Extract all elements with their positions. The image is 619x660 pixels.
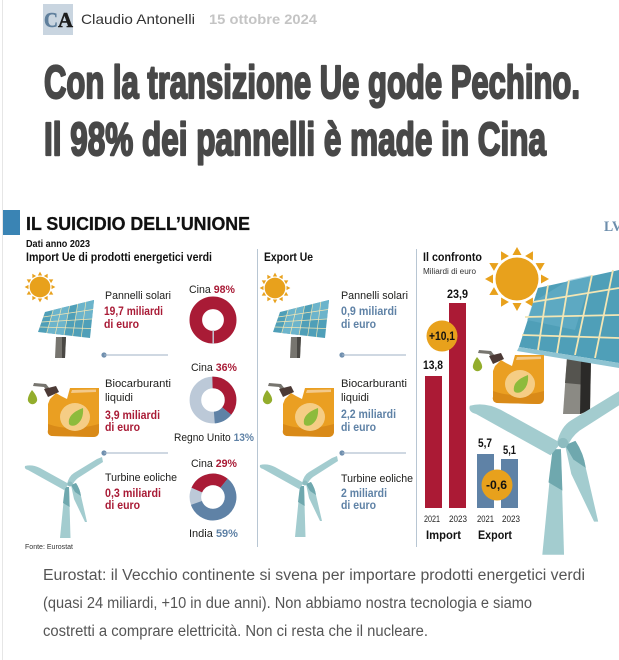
donut label India: India 59% [189, 528, 238, 540]
import solar label: di euro [104, 319, 139, 331]
connector [101, 352, 168, 358]
page edge line [2, 0, 3, 660]
import biofuel label: 3,9 miliardi [105, 410, 160, 422]
donut label Cina 29: Cina 29% [191, 458, 237, 470]
bar chart: 2023 [502, 514, 520, 524]
comparison unit: Miliardi di euro [423, 267, 477, 276]
icon: sun [260, 273, 290, 303]
import wind label: Turbine eoliche [105, 472, 177, 484]
author avatar [43, 4, 74, 35]
import heading: Import Ue di prodotti energetici verdi [26, 252, 212, 264]
bar chart: 2021 [477, 514, 494, 524]
callout +10,1: +10,1 [429, 329, 455, 343]
donut label Regno Unito: Regno Unito 13% [174, 432, 254, 444]
donut: biofuel [195, 382, 231, 418]
comparison heading: Il confronto [423, 252, 482, 264]
import wind label [105, 472, 177, 512]
icon: wind turbine [260, 456, 338, 537]
connector [339, 450, 406, 456]
import solar label [104, 290, 171, 331]
caption: Eurostat: il Vecchio continente si svena per importare prodotti energetici verdi [43, 567, 585, 584]
panel: import [25, 252, 254, 551]
bar chart: Export [478, 530, 512, 542]
panel: export [260, 252, 413, 537]
infographic heading: IL SUICIDIO DELL’UNIONE [26, 214, 250, 234]
export wind label: di euro [341, 500, 376, 512]
connector [339, 352, 406, 358]
icon: fuel can [263, 383, 334, 437]
export heading: Export Ue [264, 252, 313, 264]
export solar label: di euro [341, 319, 376, 331]
bar chart: 5,7 [478, 436, 492, 450]
icon: big wind turbine [469, 387, 619, 555]
author avatar: C [44, 8, 58, 32]
bar chart: 13,8 [423, 358, 443, 372]
callout +10,1 [426, 320, 458, 352]
icon: fuel can [28, 383, 99, 437]
donut: solar [196, 303, 230, 344]
icon: wind turbine [25, 457, 103, 538]
date: 15 ottobre 2024 [209, 11, 317, 27]
panel: comparison [423, 252, 520, 542]
source: Fonte: Eurostat [25, 544, 73, 551]
caption: (quasi 24 miliardi, +10 in due anni). Non abbiamo nostra tecnologia e siamo [43, 595, 532, 612]
donut label Cina 98: Cina 98% [189, 284, 235, 296]
donut label Cina 36: Cina 36% [191, 362, 237, 374]
subheading year: Dati anno 2023 [26, 239, 90, 250]
import biofuel label: di euro [105, 422, 140, 434]
bar chart: Import [426, 530, 461, 542]
import biofuel label [105, 378, 171, 434]
icon: sun [25, 272, 55, 302]
icon: big solar panel [517, 270, 619, 414]
import biofuel label: liquidi [105, 392, 133, 404]
icon: solar panel [38, 300, 94, 358]
import solar label: Pannelli solari [105, 290, 171, 302]
author name: Claudio Antonelli [81, 11, 195, 27]
bar chart: 5,1 [503, 443, 516, 457]
caption [43, 567, 585, 640]
author row [43, 4, 317, 35]
bar chart [423, 287, 520, 542]
export biofuel label: 2,2 miliardi [341, 409, 396, 421]
icon: solar panel [273, 300, 329, 358]
import wind label: 0,3 miliardi [105, 488, 161, 500]
export biofuel label: di euro [341, 422, 376, 434]
export biofuel label [341, 378, 407, 434]
icon: big fuel can [473, 350, 544, 404]
export wind label: Turbine eoliche [341, 473, 413, 485]
callout -0,6: -0,6 [486, 478, 507, 492]
import biofuel label: Biocarburanti [105, 378, 171, 390]
big illustration [469, 247, 619, 555]
export solar label: 0,9 miliardi [341, 306, 397, 318]
caption: costretti a comprare elettricità. Non ci resta che il nucleare. [43, 623, 428, 640]
export biofuel label: Biocarburanti [341, 378, 407, 390]
import wind label: di euro [105, 500, 140, 512]
callout -0,6 [482, 470, 512, 500]
title [44, 56, 580, 165]
export solar label [341, 290, 408, 331]
icon: big sun [485, 247, 549, 311]
donut: wind [190, 474, 236, 520]
bar chart: 23,9 [447, 287, 468, 301]
export solar label: Pannelli solari [341, 290, 408, 302]
connector [101, 450, 168, 456]
export wind label: 2 miliardi [341, 488, 387, 500]
export biofuel label: liquidi [341, 392, 369, 404]
author avatar: A [58, 8, 74, 32]
export wind label [341, 473, 413, 512]
bar chart: 2023 [449, 514, 467, 524]
bar chart: 2021 [424, 514, 440, 524]
dividers [257, 249, 258, 547]
import solar label: 19,7 miliardi [104, 306, 163, 318]
